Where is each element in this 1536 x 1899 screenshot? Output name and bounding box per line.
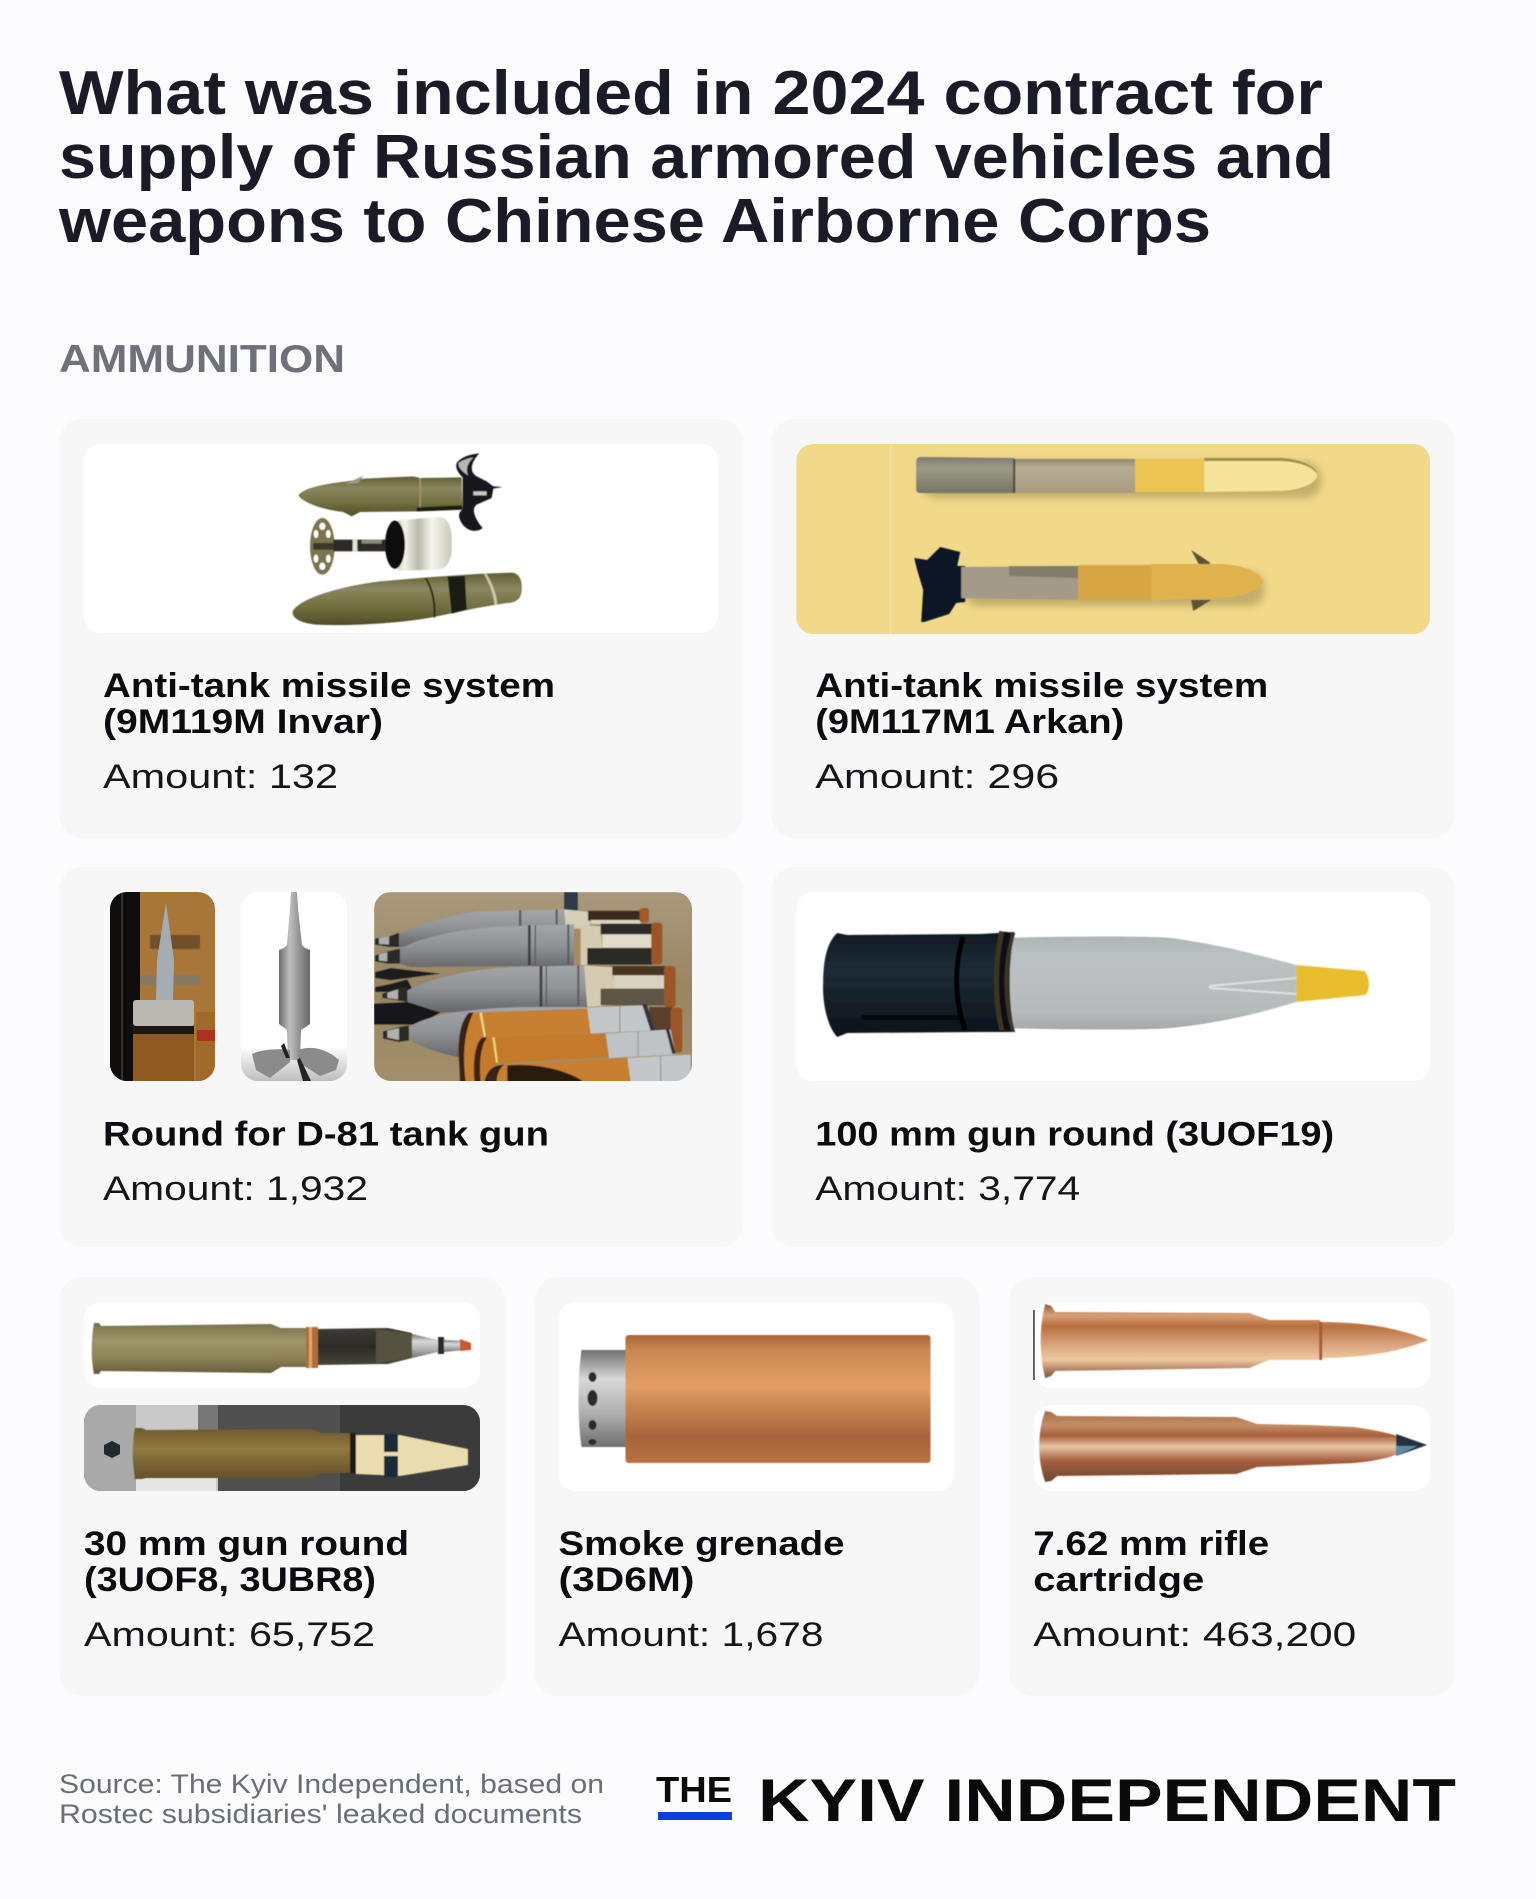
amount: Amount: 296 — [815, 758, 1059, 796]
sub-shell D — [383, 1007, 682, 1058]
image: 3UOF8 round — [84, 1302, 480, 1388]
panel: 7.62 mm rifle cartridge — [1009, 1277, 1455, 1696]
label: Round for D-81 tank gun — [103, 1116, 549, 1154]
title: What was included in 2024 contract for — [59, 59, 1323, 128]
image: 3UBR8 round on display — [84, 1405, 480, 1491]
sub-shell A — [375, 908, 649, 947]
title — [58, 59, 1334, 256]
sub-shell C — [382, 965, 676, 1013]
label: Anti-tank missile system — [815, 667, 1268, 705]
label — [1033, 1525, 1269, 1599]
image: stacked shells — [374, 892, 694, 1082]
label: 30 mm gun round — [84, 1525, 409, 1563]
title: weapons to Chinese Airborne Corps — [58, 187, 1211, 256]
label — [103, 667, 555, 741]
source note: Rostec subsidiaries' leaked documents — [59, 1799, 582, 1829]
panel: smoke grenade — [534, 1277, 980, 1696]
label — [558, 1525, 844, 1599]
label: Smoke grenade — [558, 1525, 844, 1563]
section heading: ammunition: AMMUNITION — [59, 338, 345, 381]
image: 3D6M grenade — [578, 1335, 930, 1463]
orange case 1 — [459, 1004, 655, 1082]
logo: The Kyiv Independent: KYIV INDEPENDENT — [758, 1767, 1456, 1834]
amount: Amount: 132 — [103, 758, 338, 796]
label — [84, 1525, 409, 1599]
source note: Source: The Kyiv Independent, based on — [59, 1769, 604, 1799]
image: round on display — [110, 892, 215, 1081]
label: Anti-tank missile system — [103, 667, 555, 705]
label: (3UOF8, 3UBR8) — [84, 1561, 376, 1599]
amount: Amount: 65,752 — [84, 1616, 375, 1654]
panel: 100 mm gun round — [771, 867, 1455, 1247]
source note — [59, 1769, 604, 1829]
orange case 3 — [484, 1055, 691, 1082]
label: 100 mm gun round (3UOF19) — [815, 1116, 1334, 1154]
label: (3D6M) — [558, 1561, 694, 1599]
sub-shell B — [375, 923, 662, 969]
panel: 30 mm gun round — [84, 1322, 480, 1650]
amount: Amount: 3,774 — [815, 1170, 1080, 1208]
title: supply of Russian armored vehicles and — [59, 123, 1334, 192]
label: (9M117M1 Arkan) — [815, 703, 1124, 741]
logo: The Kyiv Independent: THE — [656, 1769, 732, 1810]
amount: Amount: 463,200 — [1033, 1616, 1356, 1654]
label: cartridge — [1033, 1561, 1204, 1599]
image: 9M117M1 Arkan missiles — [796, 444, 1430, 634]
panel: round for D-81 tank gun — [103, 892, 692, 1204]
panel: 9M117M1 Arkan — [796, 444, 1430, 788]
label — [815, 667, 1268, 741]
image: rifle cartridge, copper — [1033, 1302, 1430, 1388]
panel: 9M119M Invar — [59, 419, 743, 838]
image: 100 mm round — [823, 931, 1369, 1037]
image: projectile render — [241, 892, 347, 1081]
image: 9M119M Invar missile parts — [293, 453, 522, 625]
amount: Amount: 1,932 — [103, 1170, 368, 1208]
image: rifle cartridge, steel-core — [1034, 1405, 1430, 1491]
amount: Amount: 1,678 — [558, 1616, 824, 1654]
orange case 2 — [473, 1029, 676, 1082]
label: (9M119M Invar) — [103, 703, 383, 741]
label: 7.62 mm rifle — [1033, 1525, 1269, 1563]
